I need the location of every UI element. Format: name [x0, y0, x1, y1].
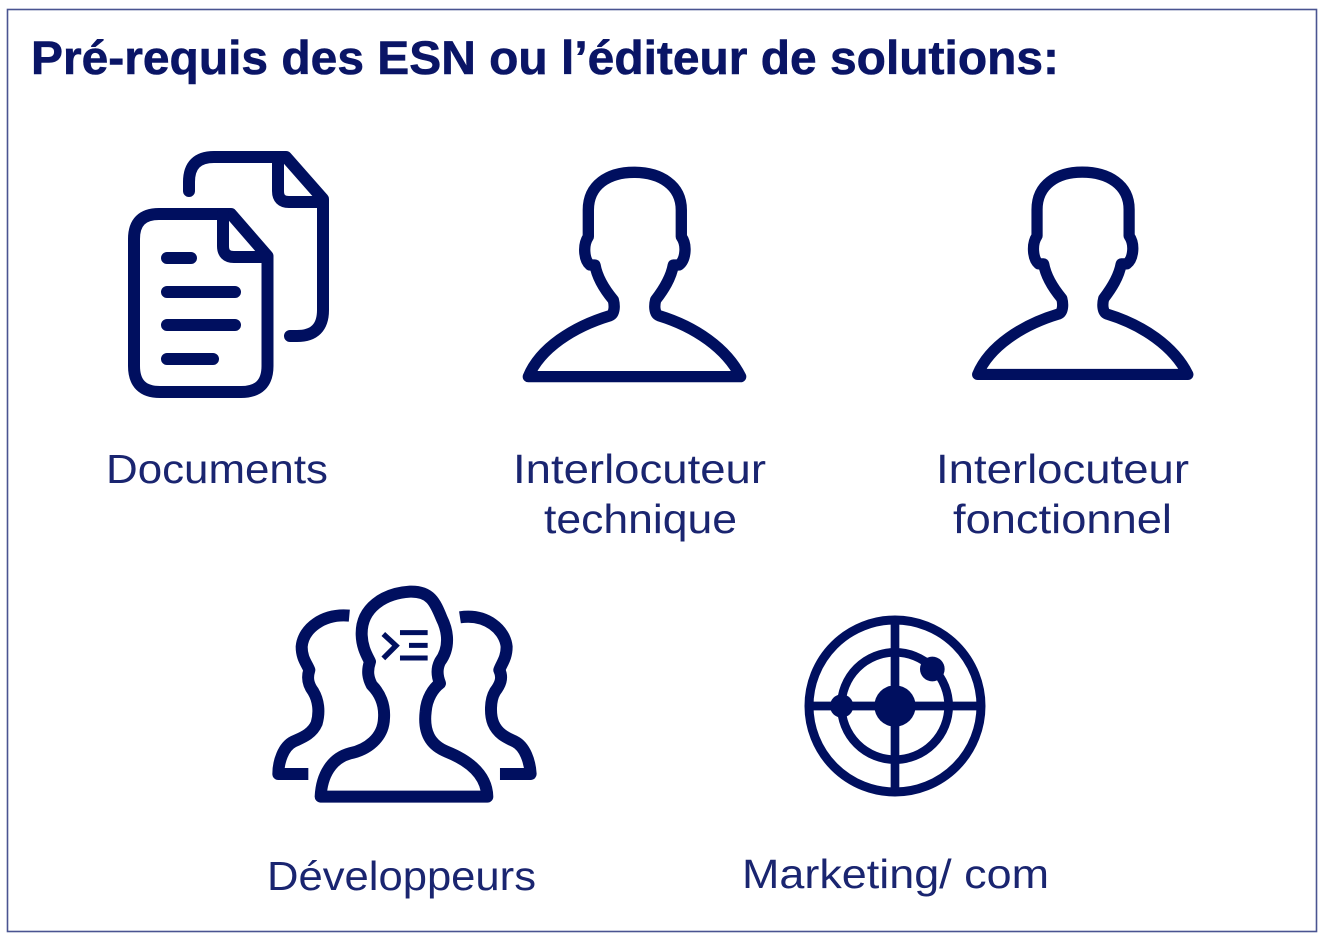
label: Interlocuteur fonctionnel: Interlocuteur [936, 446, 1189, 492]
icon: developpeurs [278, 592, 531, 797]
icon: documents [134, 157, 323, 392]
label: Documents: Documents [106, 446, 328, 492]
icon: interlocuteur fonctionnel [978, 172, 1188, 374]
label: Interlocuteur technique: Interlocuteur [513, 446, 766, 492]
label: Interlocuteur fonctionnel [936, 446, 1189, 542]
label: Interlocuteur fonctionnel: fonctionnel [953, 496, 1172, 542]
label: Developpeurs: Développeurs [267, 853, 536, 899]
label: Interlocuteur technique [513, 446, 766, 542]
icon: interlocuteur technique [528, 172, 741, 377]
label: Marketing/ com: Marketing/ com [742, 851, 1049, 897]
label: Interlocuteur technique: technique [544, 496, 737, 542]
title: Pré-requis des ESN ou l’éditeur de solutions: [31, 31, 1059, 84]
icon: marketing target [809, 620, 981, 792]
